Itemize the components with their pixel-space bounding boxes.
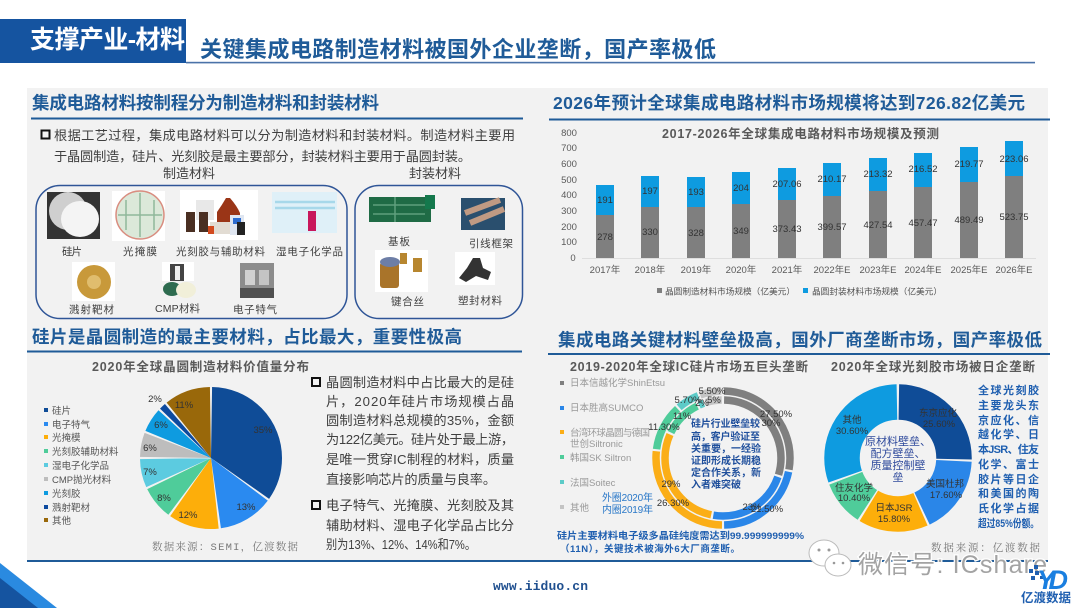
pie chart: wafer materials: 12% (178, 510, 198, 521)
double ring chart: wafer makers: 26.30% (657, 498, 690, 509)
panel: packaging materials box (355, 186, 522, 318)
pie chart: wafer materials: 7% (143, 467, 157, 478)
double ring chart: wafer makers (648, 386, 793, 525)
heading: materials by process: 集成电路材料按制程分为制造材料和封装材料 (32, 93, 380, 113)
logo: Yidu Data (1021, 565, 1071, 605)
year labels: 2025年E (951, 264, 987, 276)
labels: manufacturing items: 光掩膜 (123, 245, 158, 258)
donut chart: photoresist (835, 402, 964, 525)
pie chart: wafer materials: 6% (143, 443, 157, 454)
year labels: 2023年E (860, 264, 896, 276)
labels: manufacturing items: 湿电子化学品 (276, 245, 343, 258)
labels: packaging items: 引线框架 (469, 237, 514, 250)
year labels (590, 264, 1032, 276)
legend: wafer makers: 日本信越化学ShinEtsu (570, 377, 665, 389)
donut center text: 高，客户验证至 (691, 430, 760, 443)
double ring chart: wafer makers: 21.50% (751, 504, 784, 515)
value labels: 219.77 (954, 159, 984, 170)
legend: wafer makers: 日本胜高SUMCO (570, 402, 643, 414)
double ring chart: wafer makers: 27.50% (760, 409, 793, 420)
legend: wafer materials: 其他 (52, 515, 72, 527)
donut chart: photoresist: 住友化学 (835, 482, 873, 494)
donut chart: photoresist: 25.60% (923, 419, 956, 430)
double ring chart: wafer makers: 5% (707, 395, 721, 406)
icon: sputtering target (72, 262, 115, 301)
text block: wafer analysis: 是唯一贯穿IC制程的材料，质量 (326, 452, 514, 467)
value labels: 523.75 (999, 212, 1029, 223)
header tab (0, 19, 186, 63)
labels: manufacturing items (62, 245, 343, 316)
main title: 关键集成电路制造材料被国外企业垄断，国产率极低 (200, 37, 716, 62)
legend: wafer makers: 韩国SK Siltron (570, 452, 631, 464)
double ring chart: wafer makers: 23% (742, 502, 762, 513)
value labels: 427.54 (863, 220, 893, 231)
text block: wafer analysis: 为122亿美元。硅片处于最上游， (326, 432, 514, 447)
donut center text: 证即形成长期稳 (691, 454, 761, 467)
year labels: 2019年 (681, 264, 712, 276)
source note: photoresist: 数据来源：亿渡数据 (931, 541, 1040, 555)
grey bars (596, 176, 1023, 258)
icon: photoresist bottles (180, 190, 258, 240)
label: packaging materials: 封装材料 (409, 166, 461, 181)
note: ring legend: 外圈2020年 (602, 491, 653, 504)
y axis labels: 400 (561, 190, 577, 201)
labels: packaging items (388, 235, 514, 308)
legend: wafer makers: 台湾环球晶圆与德国 (570, 427, 650, 439)
y axis labels: 800 (561, 128, 577, 139)
pie chart: wafer materials: 35% (253, 425, 273, 436)
value labels: 278 (597, 232, 613, 243)
icon: CMP materials (162, 262, 196, 298)
year labels: 2021年 (772, 264, 803, 276)
year labels: 2026年E (996, 264, 1032, 276)
legend: wafer makers (560, 377, 665, 514)
watermark: WeChat: 微信号: ICshare (858, 551, 1047, 579)
y axis labels: 300 (561, 206, 577, 217)
callout: silicon purity (557, 530, 805, 555)
double ring chart: wafer makers: 11% (673, 411, 692, 422)
text block: photoresist analysis: 超过85%份额。 (978, 516, 1039, 530)
text block: wafer analysis: 电子特气、光掩膜、光刻胶及其 (326, 497, 514, 513)
text block: wafer analysis: 别为13%、12%、14%和7%。 (326, 537, 476, 552)
icon: bonding wire (375, 250, 428, 292)
value labels: 207.06 (772, 179, 802, 190)
labels: manufacturing items: 溅射靶材 (69, 303, 114, 316)
blue bars (596, 141, 1023, 215)
text block: photoresist analysis: 氏化学占据 (978, 501, 1039, 515)
bottom rule (27, 560, 1048, 562)
donut chart: photoresist: 美国杜邦 (926, 478, 964, 490)
donut center text: 关重要，一经验 (691, 442, 761, 455)
year labels: 2024年E (905, 264, 941, 276)
donut chart: photoresist: 东京应化 (919, 407, 957, 419)
text block: photoresist analysis: 和美国的陶 (978, 486, 1039, 500)
pie chart: wafer materials: 2% (148, 394, 162, 405)
value labels: 197 (642, 186, 658, 197)
legend: wafer materials: 硅片 (52, 405, 71, 417)
donut chart: photoresist: 10.40% (838, 493, 871, 504)
text block: wafer analysis: 圆制造材料总规模的35%，金额 (326, 413, 514, 428)
value labels: 328 (688, 228, 704, 239)
icon: silicon wafer (47, 192, 100, 239)
labels: manufacturing items: 电子特气 (233, 303, 278, 316)
bar legend (657, 286, 942, 296)
source note: wafer materials: 数据来源：SEMI，亿渡数据 (152, 540, 298, 554)
watermark: WeChat (809, 540, 1047, 579)
heading: silicon wafer share: 硅片是晶圆制造的最主要材料，占比最大，重要性极高 (32, 327, 462, 347)
value labels: 373.43 (772, 224, 802, 235)
heading: market size: 2026年预计全球集成电路材料市场规模将达到726.82亿美元 (553, 93, 1025, 113)
donut center text: 入者难突破 (691, 478, 741, 491)
value labels: 213.32 (863, 169, 893, 180)
value labels: 223.06 (999, 154, 1029, 165)
pie chart: wafer materials: 6% (154, 420, 168, 431)
donut center text: 原材料壁垒、 (865, 434, 931, 448)
pie chart: wafer materials: 13% (236, 502, 256, 513)
legend: wafer makers: 其他 (570, 502, 590, 514)
pie chart: wafer materials (143, 394, 273, 521)
value labels: 210.17 (817, 174, 847, 185)
donut chart: photoresist: 其他 (842, 414, 862, 426)
value labels: 399.57 (817, 222, 847, 233)
labels: manufacturing items: CMP材料 (155, 302, 200, 315)
year labels: 2020年 (726, 264, 757, 276)
text block: wafer analysis: 辅助材料、湿电子化学品占比分 (326, 518, 514, 533)
bar chart: market size (561, 128, 1036, 296)
text block: process intro: 于晶圆制造，硅片、光刻胶是最主要部分，封装材料主要用于晶圆封装。 (54, 148, 471, 164)
double ring chart: wafer makers: 11.30% (648, 422, 680, 433)
footer URL: www.iiduo.cn (493, 579, 588, 594)
year labels: 2022年E (814, 264, 850, 276)
chart title: photoresist: 2020年全球光刻胶市场被日企垄断 (831, 359, 1035, 374)
panel: content background (27, 88, 1048, 560)
double ring chart: wafer makers: 2% (695, 398, 709, 409)
chart title: wafer oligopoly: 2019-2020年全球IC硅片市场五巨头垄断 (570, 359, 808, 374)
year labels: 2018年 (635, 264, 666, 276)
donut center text: 硅片行业壁垒较 (691, 417, 760, 430)
panel: manufacturing materials box (36, 186, 347, 318)
text block: wafer analysis: 片，2020年硅片市场规模占晶 (326, 393, 514, 409)
header tab: 支撑产业-材料 (30, 26, 185, 54)
y axis labels: 500 (561, 175, 577, 186)
value labels: 216.52 (908, 164, 938, 175)
note: ring legend (602, 491, 653, 516)
value labels: 489.49 (954, 215, 984, 226)
legend: wafer makers: 法国Soitec (570, 477, 616, 489)
label: manufacturing materials: 制造材料 (163, 166, 215, 181)
bar legend: 晶圆制造材料市场规模（亿美元） (665, 286, 795, 296)
legend: wafer materials: 光刻胶辅助材料 (52, 446, 119, 458)
donut center text: 配方壁垒、 (870, 446, 926, 460)
text block: wafer analysis (312, 375, 514, 552)
value labels: 457.47 (908, 218, 938, 229)
text block: photoresist analysis: 化学、富士 (978, 457, 1039, 471)
note: ring legend: 内圈2019年 (602, 503, 653, 516)
chart title: wafer materials: 2020年全球晶圆制造材料价值量分布 (92, 359, 309, 374)
text block: photoresist analysis: 主要龙头东 (978, 398, 1039, 412)
decoration: bottom-left corner (0, 563, 57, 608)
labels: manufacturing items: 硅片 (62, 245, 82, 258)
text block: photoresist analysis: 本JSR、住友 (978, 442, 1039, 456)
donut center text: 质量控制壁 (870, 458, 926, 472)
value labels (597, 154, 1029, 243)
icon: molding compound (455, 252, 495, 285)
donut center text (691, 417, 761, 491)
value labels: 204 (733, 183, 749, 194)
text block: photoresist analysis: 京应化、信 (978, 413, 1039, 427)
pie chart: wafer materials: 8% (157, 493, 171, 504)
text block: photoresist analysis (978, 383, 1039, 530)
callout: silicon purity: 硅片主要材料电子级多晶硅纯度需达到99.999999999% (557, 530, 805, 542)
logo: Yidu Data: YD (1037, 565, 1068, 595)
legend: wafer materials: 电子特气 (52, 419, 91, 431)
icon: substrate (369, 195, 435, 222)
donut chart: photoresist: 日本JSR (876, 502, 913, 514)
chart title: market size: 2017-2026年全球集成电路材料市场规模及预测 (662, 126, 939, 141)
icon: electronic gases (240, 263, 274, 298)
y axis labels: 100 (561, 237, 577, 248)
text block: process intro (42, 128, 515, 164)
legend: wafer materials: 光刻胶 (52, 488, 81, 500)
logo: Yidu Data: 亿渡数据 (1021, 590, 1071, 605)
y axis labels: 600 (561, 159, 577, 170)
callout: silicon purity: （11N），关键技术被海外6大厂商垄断。 (560, 543, 740, 555)
value labels: 330 (642, 227, 658, 238)
heading: key material barriers: 集成电路关键材料壁垒极高，国外厂商垄断市场，国产率极低 (558, 330, 1042, 350)
icon: wet chemicals (272, 192, 337, 233)
legend: wafer materials: 湿电子化学品 (52, 460, 109, 472)
donut chart: photoresist: 17.60% (930, 490, 963, 501)
text block: photoresist analysis: 胶片等日企 (978, 472, 1039, 486)
text block: photoresist analysis: 全球光刻胶 (978, 383, 1039, 397)
double ring chart: wafer makers: 30% (761, 418, 781, 429)
text block: process intro: 根据工艺过程，集成电路材料可以分为制造材料和封装材料。制造材料主要用 (54, 128, 515, 143)
double ring chart: wafer makers: 5.70% (675, 395, 702, 406)
value labels: 193 (688, 187, 704, 198)
text block: wafer analysis: 直接影响芯片的质量与良率。 (326, 471, 496, 487)
text block: photoresist analysis: 越化学、日 (978, 427, 1039, 441)
legend: wafer materials: 溅射靶材 (52, 502, 91, 514)
labels: packaging items: 塑封材料 (458, 294, 502, 307)
legend: wafer materials: CMP抛光材料 (52, 474, 112, 486)
value labels: 349 (733, 226, 749, 237)
donut center text: 垒 (892, 471, 904, 484)
year labels: 2017年 (590, 264, 621, 276)
labels: packaging items: 键合丝 (391, 295, 424, 308)
y axis labels: 200 (561, 222, 577, 233)
donut chart: photoresist: 15.80% (878, 514, 911, 525)
icon: photomask (112, 191, 165, 241)
double ring chart: wafer makers: 5.50% (699, 386, 726, 397)
text block: wafer analysis: 晶圆制造材料中占比最大的是硅 (326, 375, 514, 390)
legend: wafer materials (44, 405, 119, 527)
donut center text (865, 434, 931, 484)
y axis labels: 0 (570, 253, 576, 264)
icon: lead frame (461, 198, 505, 230)
legend: wafer makers: 世创Siltronic (570, 438, 623, 450)
bar legend: 晶圆封装材料市场规模（亿美元） (812, 286, 942, 296)
donut chart: photoresist: 30.60% (836, 426, 869, 437)
value labels: 191 (597, 195, 613, 206)
labels: packaging items: 基板 (388, 235, 410, 248)
double ring chart: wafer makers: 29% (661, 479, 681, 490)
labels: manufacturing items: 光刻胶与辅助材料 (176, 245, 266, 258)
pie chart: wafer materials: 11% (175, 400, 194, 411)
y axis labels (561, 128, 577, 264)
donut center text: 定合作关系，新 (691, 466, 761, 479)
legend: wafer materials: 光掩模 (52, 432, 81, 444)
y axis labels: 700 (561, 143, 577, 154)
